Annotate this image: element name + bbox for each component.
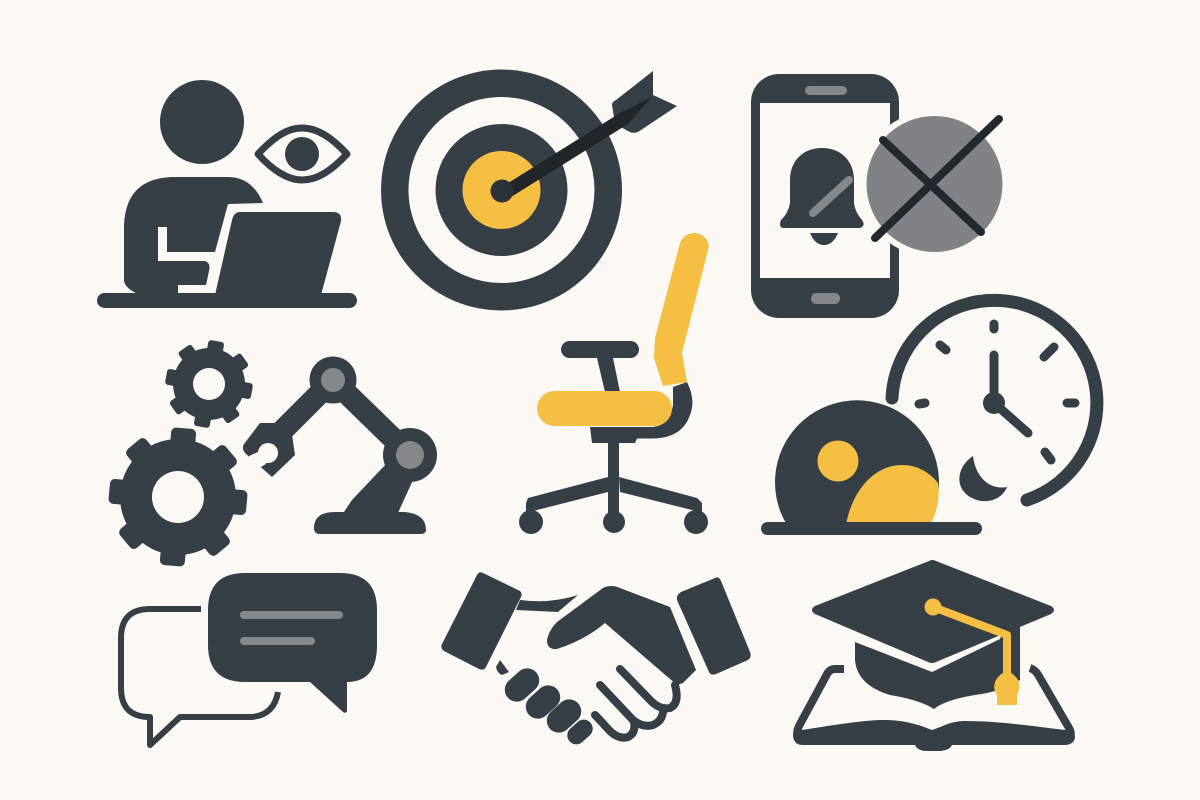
- icon: graduation cap on open book: [793, 560, 1075, 751]
- icon: person at laptop with eye: [97, 80, 357, 308]
- icon: office chair: [519, 233, 709, 534]
- icon: phone with muted bell: [751, 74, 1008, 318]
- robot arm: [243, 356, 437, 534]
- small gear: [165, 340, 253, 428]
- icon: gears and robot arm: [108, 340, 437, 567]
- icon: sleep and clock: [761, 300, 1097, 535]
- icon: target with arrow: [381, 70, 677, 310]
- large gear: [108, 427, 248, 567]
- icon: handshake: [441, 572, 751, 748]
- icon: chat bubbles: [121, 573, 377, 745]
